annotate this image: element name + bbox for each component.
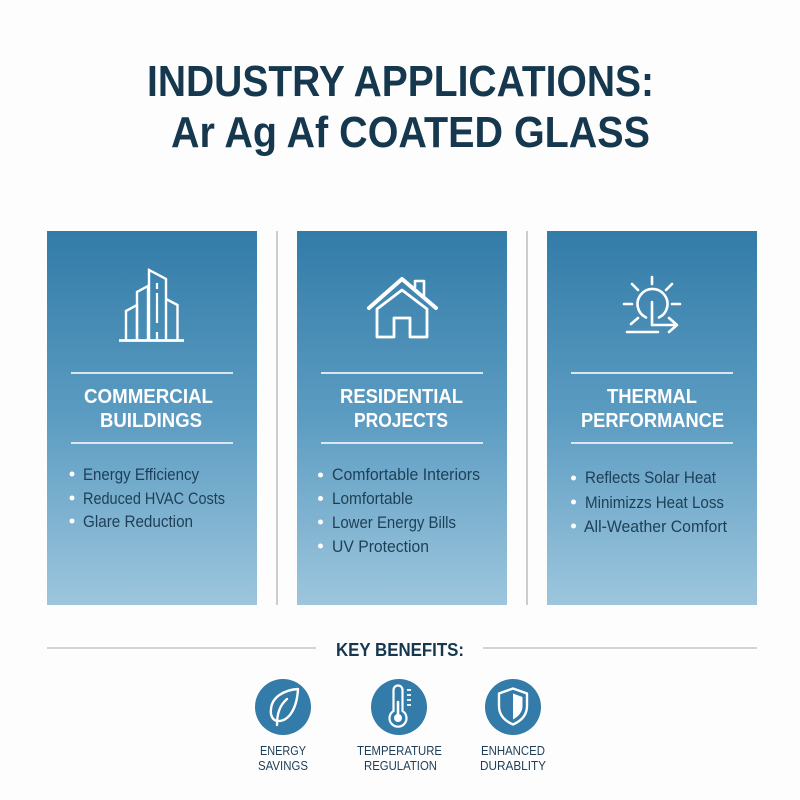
panel: thermal performance [547,231,757,605]
label: temperature regulation: TEMPERATURE [357,743,442,758]
icon: thermometer [390,686,411,727]
title [147,57,654,157]
heading: thermal performance: PERFORMANCE [581,409,724,432]
list: residential benefits: Comfortable Interiors [332,466,480,484]
heading: residential projects: PROJECTS [354,409,448,432]
heading: residential projects: RESIDENTIAL [340,385,463,408]
icon: shield [499,688,527,724]
list: commercial benefits: Energy Efficiency [83,466,200,484]
list: residential benefits: UV Protection [332,538,429,556]
heading: thermal performance: THERMAL [607,385,697,408]
divider [526,231,528,605]
heading: commercial buildings: COMMERCIAL [84,385,213,408]
benefit: temperature regulation [357,679,442,773]
list: thermal benefits: All-Weather Comfort [584,518,727,536]
icon: house [369,279,436,337]
list: thermal benefits: Minimizzs Heat Loss [585,494,724,512]
list: thermal benefits: Reflects Solar Heat [585,469,716,487]
heading: commercial buildings [71,372,233,444]
label: temperature regulation [357,743,442,773]
list: residential benefits [318,466,480,556]
title: Ar Ag Af COATED GLASS [171,108,650,157]
title: INDUSTRY APPLICATIONS: [147,57,654,106]
divider [276,231,278,605]
heading: thermal performance [571,372,733,444]
heading: commercial buildings: BUILDINGS [100,409,202,432]
heading: residential projects [321,372,483,444]
benefit: energy savings [255,679,311,773]
list: residential benefits: Lomfortable [332,490,413,508]
icon: office buildings [119,270,184,340]
list: commercial benefits: Glare Reduction [83,513,193,531]
icon: sun with reflected arrow [624,277,680,332]
list: thermal benefits [571,469,727,536]
label: enhanced durability [480,743,546,773]
panel: residential projects [297,231,507,605]
label: enhanced durability: ENHANCED [481,743,545,758]
label: energy savings: ENERGY [260,743,306,758]
key benefits heading: KEY BENEFITS: [336,639,464,660]
label: energy savings: SAVINGS [258,758,308,773]
list: residential benefits: Lower Energy Bills [332,514,456,532]
icon: leaf [271,689,298,725]
label: enhanced durability: DURABLITY [480,758,546,773]
benefit: enhanced durability [480,679,546,773]
list: commercial benefits: Reduced HVAC Costs [83,490,225,508]
list: commercial benefits [70,466,225,531]
panel: commercial buildings [47,231,257,605]
label: energy savings [258,743,308,773]
label: temperature regulation: REGULATION [364,758,437,773]
